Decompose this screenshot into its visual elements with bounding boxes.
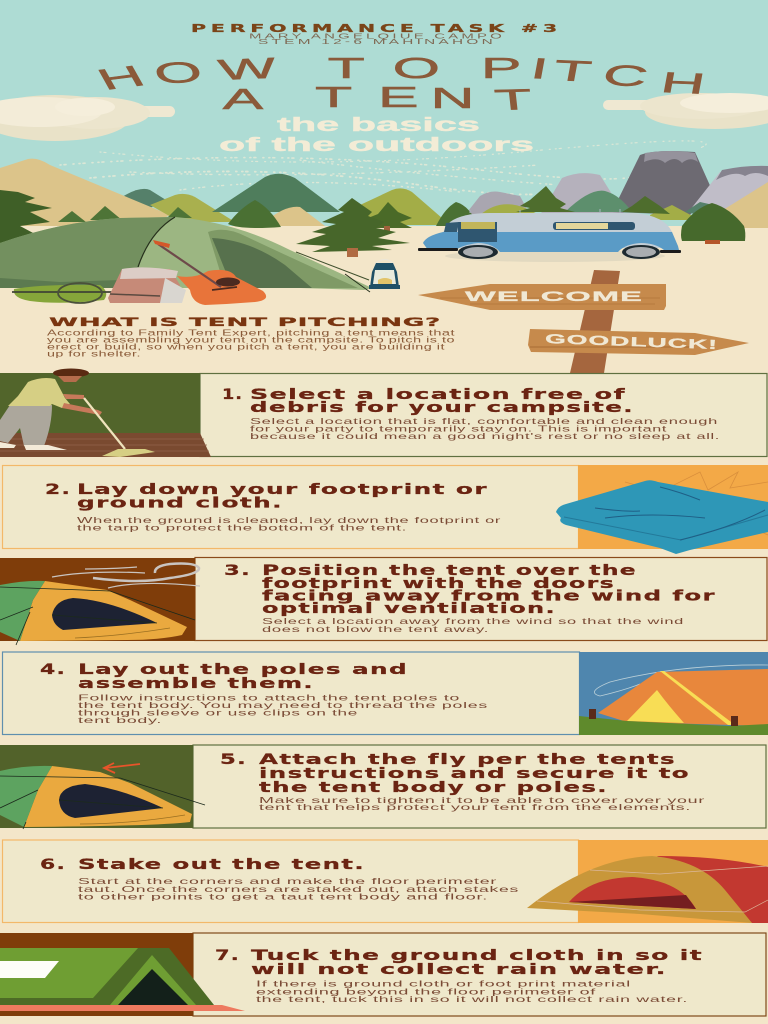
step 1 heading [250,387,634,416]
step 7 heading: Tuck the ground cloth in so it [251,948,703,964]
step 4 panel [2,652,768,735]
step 2 body: the tarp to protect the bottom of the tent. [77,522,407,532]
pine trees and bushes [0,186,745,257]
step 4 body [78,692,488,725]
step 4 heading [78,662,408,692]
step 2 panel [2,465,768,554]
sand ground background [0,226,768,1024]
step 7 illustration: green tent on mat [0,933,245,1016]
subtitle: the basics of the outdoors: the basics [277,115,480,136]
step 6 body: taut. Once the corners are staked out, attach stakes [78,884,519,894]
main green tent [0,217,372,292]
step 6 body: to other points to get a taut tent body and floor. [78,892,488,902]
step 2 body: When the ground is cleaned, lay down the footprint or [77,515,501,525]
step 3 illustration: tent in wind [0,558,200,645]
step 5 body: tent that helps protect your tent from the elements. [259,802,691,812]
step 1 panel [0,368,767,457]
step 4 body: Follow instructions to attach the tent poles to [78,692,460,702]
step 7 heading: will not collect rain water. [251,962,667,978]
step 7 body: the tent, tuck this in so it will not collect rain water. [256,994,688,1004]
step 3 panel [0,558,767,645]
step 1 body: for your party to temporarily stay on. This is important [250,424,668,434]
step 5 heading: instructions and secure it to [259,766,690,782]
what is tent pitching text: According to Family Tent Expert, pitching a tent means that [47,328,456,338]
subtitle: the basics of the outdoors: of the outdoors [219,135,534,156]
header: performance task: MARY ANGELQIUE CAMPO [249,34,505,40]
step 5 heading [259,752,690,796]
goodluck sign: GOODLUCK! [545,331,718,352]
step 6 illustration: red dome tent [527,840,768,923]
step 2 heading [77,482,488,512]
step 3 body: Select a location away from the wind so that the wind [262,616,684,626]
step 4 number: 4. [40,662,66,678]
step 5 number: 5. [220,752,247,768]
step 2 heading: Lay down your footprint or [77,482,488,498]
step 5 heading: the tent body or poles. [259,780,608,796]
step 2 body [77,515,501,532]
step 3 heading: optimal ventilation. [262,601,556,617]
lantern [369,260,400,289]
header: performance task [191,23,562,46]
title: how to pitch a tent: ATENT [223,81,533,117]
step 3 heading: Position the tent over the [262,563,637,579]
header: performance task: PERFORMANCE TASK #3 [191,23,562,35]
step 5 body: Make sure to tighten it to be able to cover over your [259,795,705,805]
sky speckles [60,141,706,194]
step 4 body: tent body. [78,715,162,725]
step 7 number: 7. [215,948,240,964]
welcome sign [418,284,666,310]
welcome sign: WELCOME [465,288,643,304]
step 5 panel [0,745,766,829]
step 7 body: If there is ground cloth or foot print material [256,978,631,988]
step 6 number: 6. [40,857,66,873]
step 7 panel [0,933,766,1016]
sky background [0,0,768,235]
step 5 heading: Attach the fly per the tents [259,752,676,768]
step 7 body [256,978,688,1004]
camper van [418,209,681,262]
step 2 number: 2. [45,482,71,498]
what is tent pitching heading: WHAT IS TENT PITCHING? [49,315,441,329]
step 6 body: Start at the corners and make the floor perimeter [78,876,497,886]
guitar [153,240,266,305]
what is tent pitching text: up for shelter. [47,348,141,358]
step 1 illustration: person sweeping [0,368,211,457]
step 5 body [259,795,705,812]
step 1 heading: debris for your campsite. [250,400,634,416]
step 3 number: 3. [224,563,251,579]
step 7 heading [251,948,703,978]
step 6 panel [2,840,768,923]
step 2 heading: ground cloth. [77,496,283,512]
mountains [0,151,768,228]
step 1 body: Select a location that is flat, comfortable and clean enough [250,416,718,426]
backpack [108,267,186,303]
title: how to pitch a tent: HOWTOPITCH [91,52,708,100]
header: performance task: STEM 12-6 MAHINAHON [258,39,496,46]
cloud right [603,93,768,129]
step 3 heading: facing away from the wind for [262,588,716,604]
goodluck sign [528,329,749,355]
step 2 illustration: blanket [556,465,768,554]
step 4 heading: Lay out the poles and [78,662,408,678]
step 7 body: extending beyond the floor perimeter of [256,986,597,996]
step 1 heading: Select a location free of [250,387,626,403]
subtitle: the basics of the outdoors [219,115,534,156]
step 3 heading [262,563,716,617]
what is tent pitching text: you are assembling your tent on the campsite. To pitch is to [47,334,455,344]
step 4 heading: assemble them. [78,676,314,692]
wooden signpost [418,270,749,373]
step 4 illustration: orange tent [579,652,768,735]
what is tent pitching text: erect or build, so when you pitch a tent, you are building it [47,342,446,352]
sleeping bag [12,283,120,303]
step 1 body [250,416,720,441]
step 4 body: the tent body. You may need to thread the poles [78,700,488,710]
step 1 number: 1. [222,387,243,403]
step 4 body: through sleeve or use clips on the [78,708,358,718]
step 6 heading: Stake out the tent. [78,857,365,873]
step 3 body [262,616,684,634]
what is tent pitching text [47,328,456,358]
step 3 heading: footprint with the doors [262,576,615,592]
step 1 body: because it could mean a good night's rest or no sleep at all. [250,431,720,441]
step 3 body: does not blow the tent away. [262,624,489,634]
step 5 illustration: tent with arrow [0,745,205,829]
cloud left [0,95,175,141]
step 6 body [78,876,519,902]
